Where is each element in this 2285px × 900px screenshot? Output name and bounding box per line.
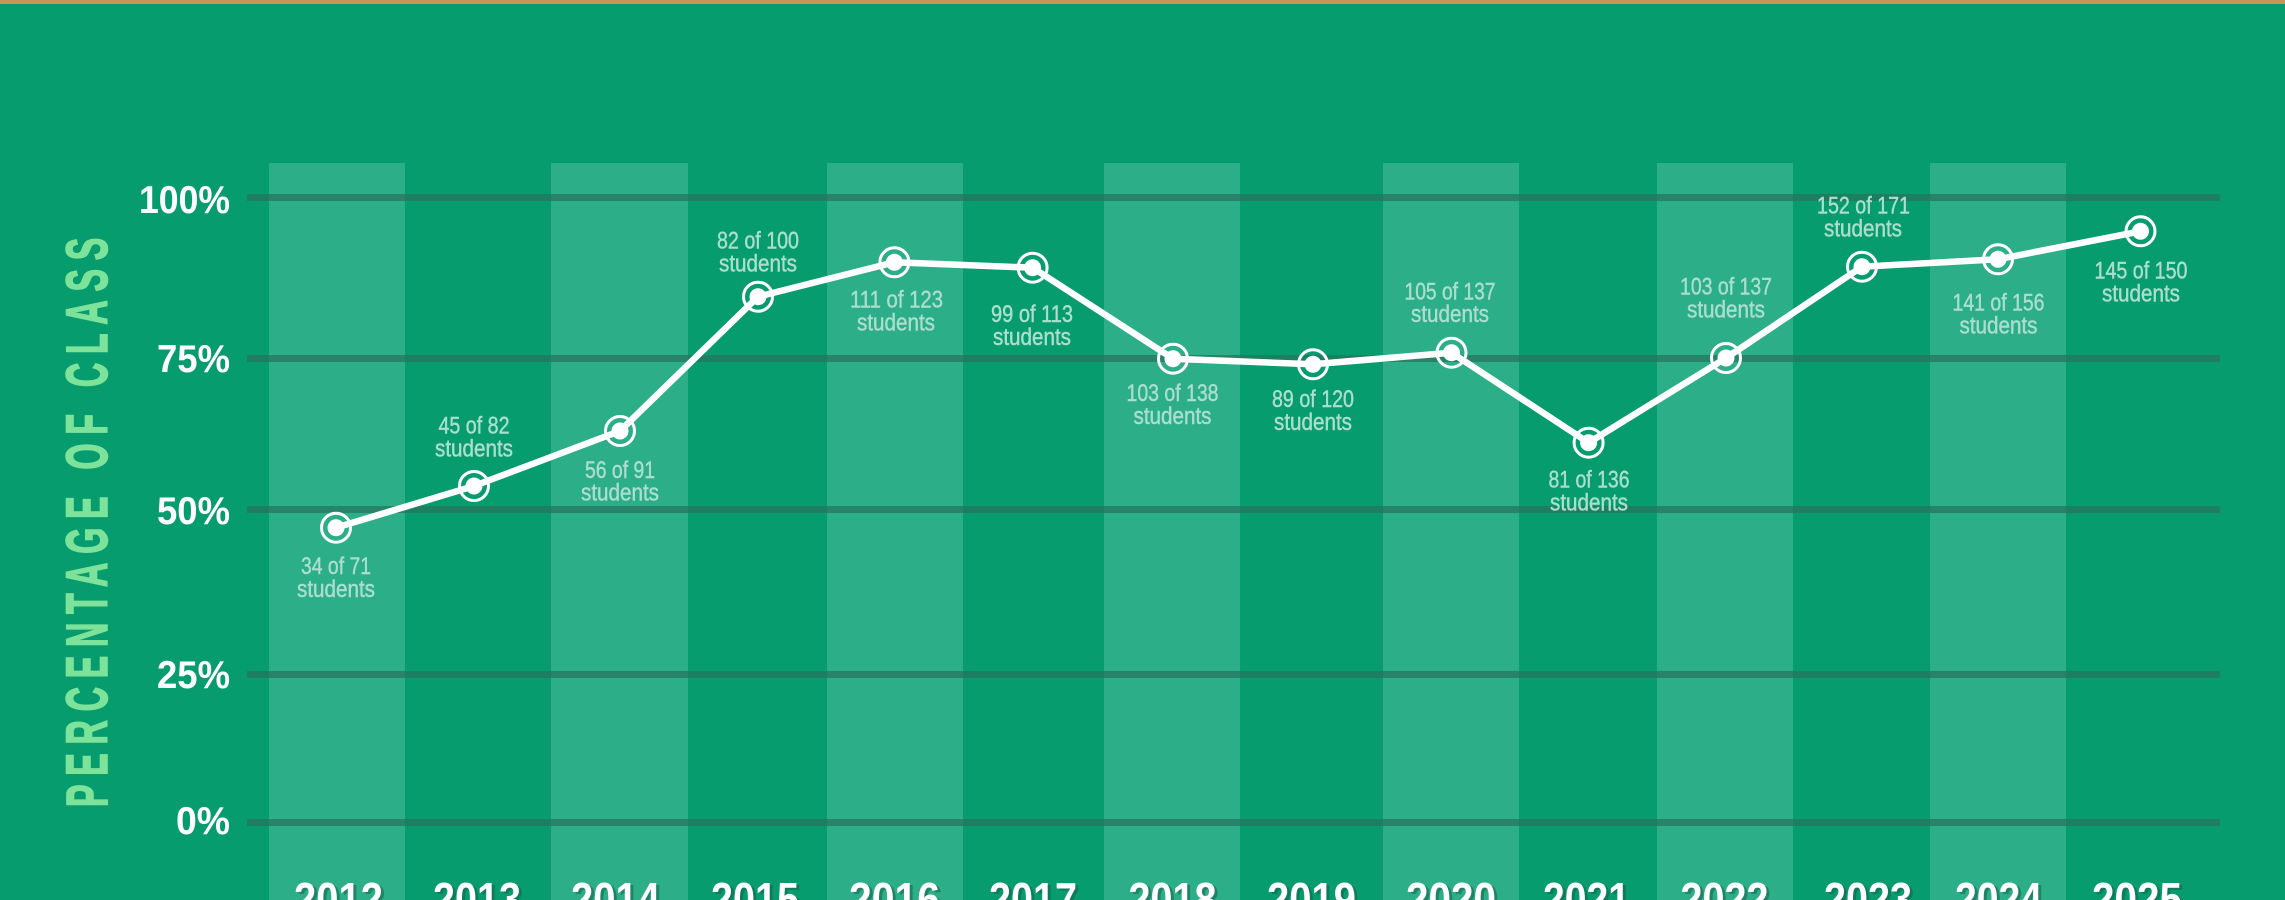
- label 2017: students: [993, 324, 1071, 351]
- trend line: [336, 231, 2140, 528]
- label 2024: 141 of 156: [1952, 290, 2044, 317]
- data labels: [297, 192, 2188, 603]
- label 2015: [717, 227, 799, 278]
- label 2019: students: [1274, 409, 1352, 436]
- label 2013: 45 of 82: [438, 412, 510, 439]
- alternating year columns: [269, 163, 2066, 900]
- y-axis labels: 100%: [139, 179, 230, 222]
- label 2017: 99 of 113: [991, 301, 1073, 328]
- label 2019: 89 of 120: [1272, 386, 1354, 413]
- y-axis labels: 25%: [157, 654, 230, 697]
- label 2025: students: [2102, 281, 2180, 308]
- label 2016: students: [857, 310, 935, 337]
- label 2024: [1952, 290, 2044, 339]
- y-axis labels: 50%: [157, 490, 230, 533]
- label 2020: students: [1411, 301, 1489, 328]
- label 2025: [2094, 257, 2188, 308]
- label 2014: students: [581, 480, 659, 507]
- label 2013: students: [435, 436, 513, 462]
- label 2012: students: [297, 576, 375, 603]
- label 2021: [1548, 467, 1630, 517]
- y-axis labels: 75%: [157, 338, 230, 381]
- label 2022: [1680, 273, 1772, 323]
- label 2020: 105 of 137: [1404, 278, 1496, 305]
- y-axis labels: 0%: [176, 800, 230, 843]
- year axis labels: [294, 873, 2182, 900]
- label 2014: [581, 457, 659, 507]
- label 2023: 152 of 171: [1817, 192, 1910, 219]
- label 2021: students: [1550, 490, 1628, 517]
- top accent strip: [0, 0, 2285, 4]
- label 2016: 111 of 123: [850, 287, 943, 314]
- label 2023: students: [1824, 216, 1902, 243]
- label 2019: [1272, 386, 1354, 436]
- label 2024: students: [1960, 312, 2038, 339]
- y-axis labels: [139, 179, 230, 843]
- label 2016: [850, 287, 943, 337]
- label 2018: students: [1134, 403, 1212, 430]
- label 2022: 103 of 137: [1680, 273, 1772, 300]
- label 2023: [1817, 192, 1910, 243]
- label 2018: 103 of 138: [1126, 380, 1218, 407]
- data point markers: [322, 217, 2155, 542]
- label 2015: 82 of 100: [717, 227, 799, 254]
- label 2014: 56 of 91: [585, 457, 655, 484]
- label 2013: [435, 412, 513, 462]
- label 2020: [1404, 278, 1496, 328]
- gridlines: [247, 194, 2220, 826]
- label 2022: students: [1687, 296, 1765, 323]
- label 2021: 81 of 136: [1548, 467, 1630, 494]
- label 2017: [991, 301, 1073, 351]
- label 2025: 145 of 150: [2094, 257, 2188, 284]
- label 2012: [297, 553, 375, 603]
- label 2018: [1126, 380, 1218, 430]
- label 2012: 34 of 71: [301, 553, 371, 580]
- label 2015: students: [719, 251, 797, 278]
